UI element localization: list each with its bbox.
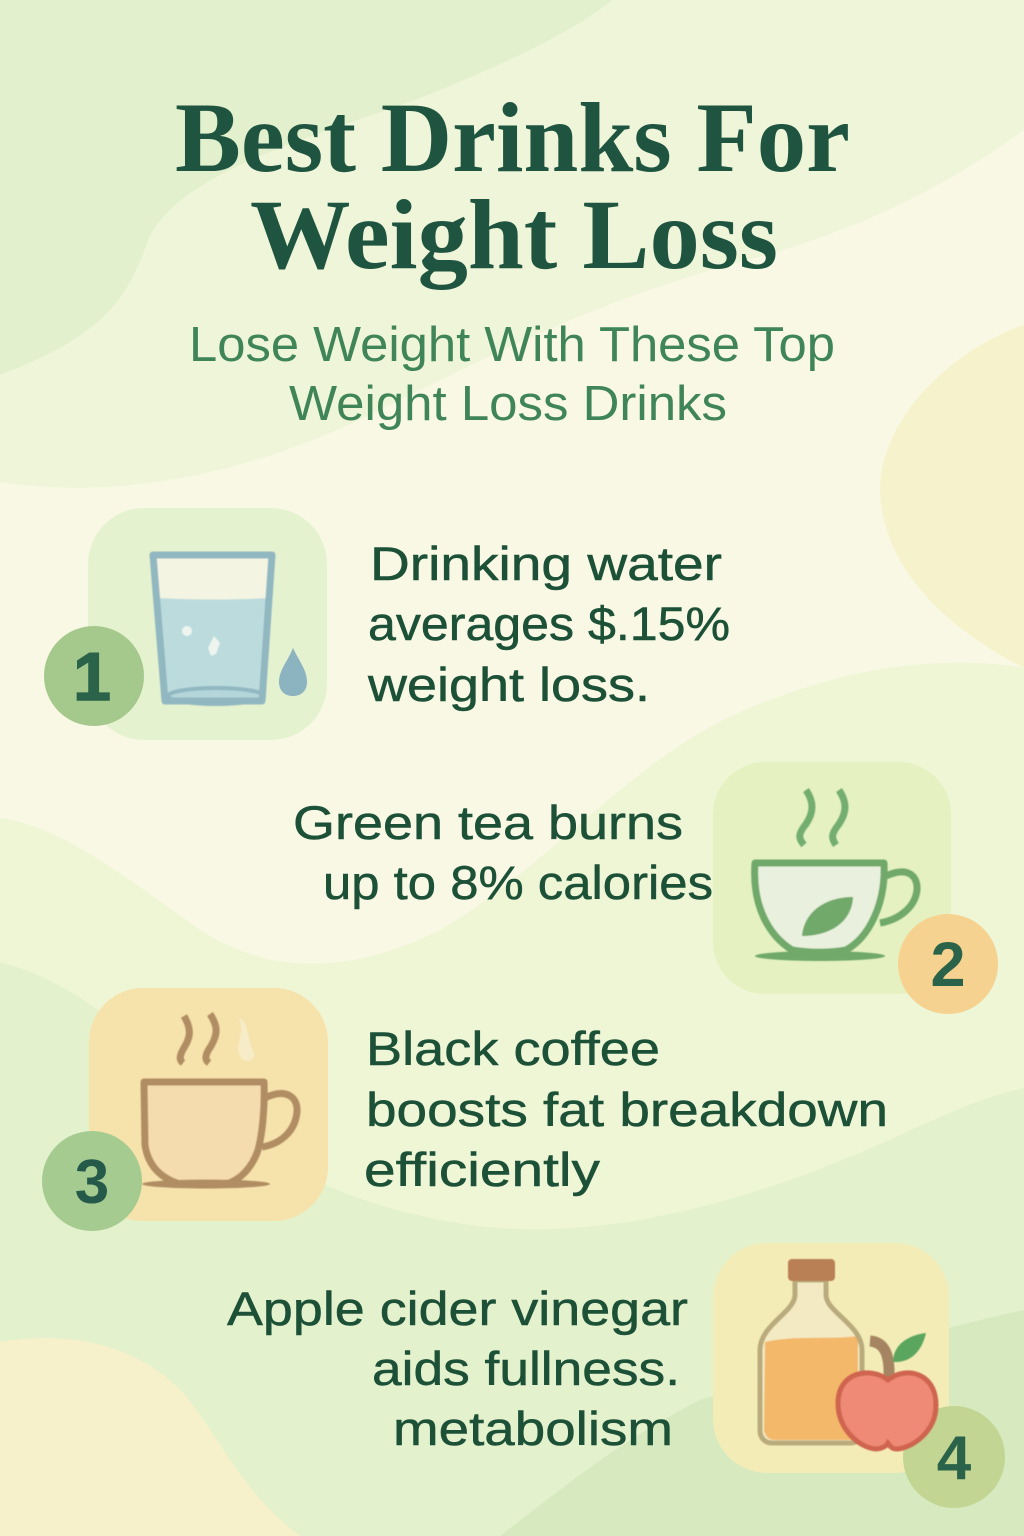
subtitle <box>189 318 835 431</box>
text: vinegar: aids fullness. <box>372 1342 680 1395</box>
title: Weight Loss <box>250 179 778 290</box>
icon tile: vinegar <box>713 1243 949 1473</box>
icon: glass of water <box>153 555 272 704</box>
text: coffee: efficiently <box>364 1143 601 1196</box>
badge 1 <box>44 626 144 726</box>
text: coffee: Black coffee <box>366 1022 660 1075</box>
text: water: weight loss. <box>367 658 650 711</box>
text: coffee <box>364 1022 888 1196</box>
item 3: black coffee <box>42 988 888 1231</box>
icon tile: water <box>88 508 327 740</box>
icon: coffee cup <box>142 1014 297 1188</box>
badge 1: 1 <box>73 639 111 715</box>
title <box>175 82 850 290</box>
icon tile: green tea <box>713 762 951 994</box>
text: water <box>367 537 730 711</box>
badge 3 <box>42 1131 142 1231</box>
title: Best Drinks For <box>175 82 850 193</box>
text: water: Drinking water <box>370 537 722 590</box>
text: green tea: up to 8% calories <box>323 856 713 909</box>
text: vinegar <box>227 1282 688 1455</box>
badge 4 <box>903 1406 1005 1508</box>
item 2: green tea <box>293 762 998 1014</box>
icon: apple <box>838 1333 936 1449</box>
text: vinegar: Apple cider vinegar <box>227 1282 688 1335</box>
subtitle: Weight Loss Drinks <box>289 377 727 431</box>
badge 4: 4 <box>937 1424 972 1493</box>
text: vinegar: metabolism <box>393 1402 673 1455</box>
text: water: averages $.15% <box>368 597 730 650</box>
badge 2: 2 <box>930 930 966 1000</box>
item 1: water <box>44 508 730 740</box>
icon: water drop <box>279 648 307 696</box>
item 4: apple cider vinegar <box>227 1243 1005 1508</box>
text: coffee: boosts fat breakdown <box>366 1083 888 1136</box>
icon: bottle <box>760 1259 862 1443</box>
badge 2 <box>898 914 998 1014</box>
icon tile: coffee <box>89 988 328 1221</box>
subtitle: Lose Weight With These Top <box>189 318 835 372</box>
text: green tea: Green tea burns <box>293 796 683 849</box>
text: green tea <box>293 796 713 909</box>
badge 3: 3 <box>75 1148 109 1217</box>
icon: tea cup <box>755 790 917 961</box>
